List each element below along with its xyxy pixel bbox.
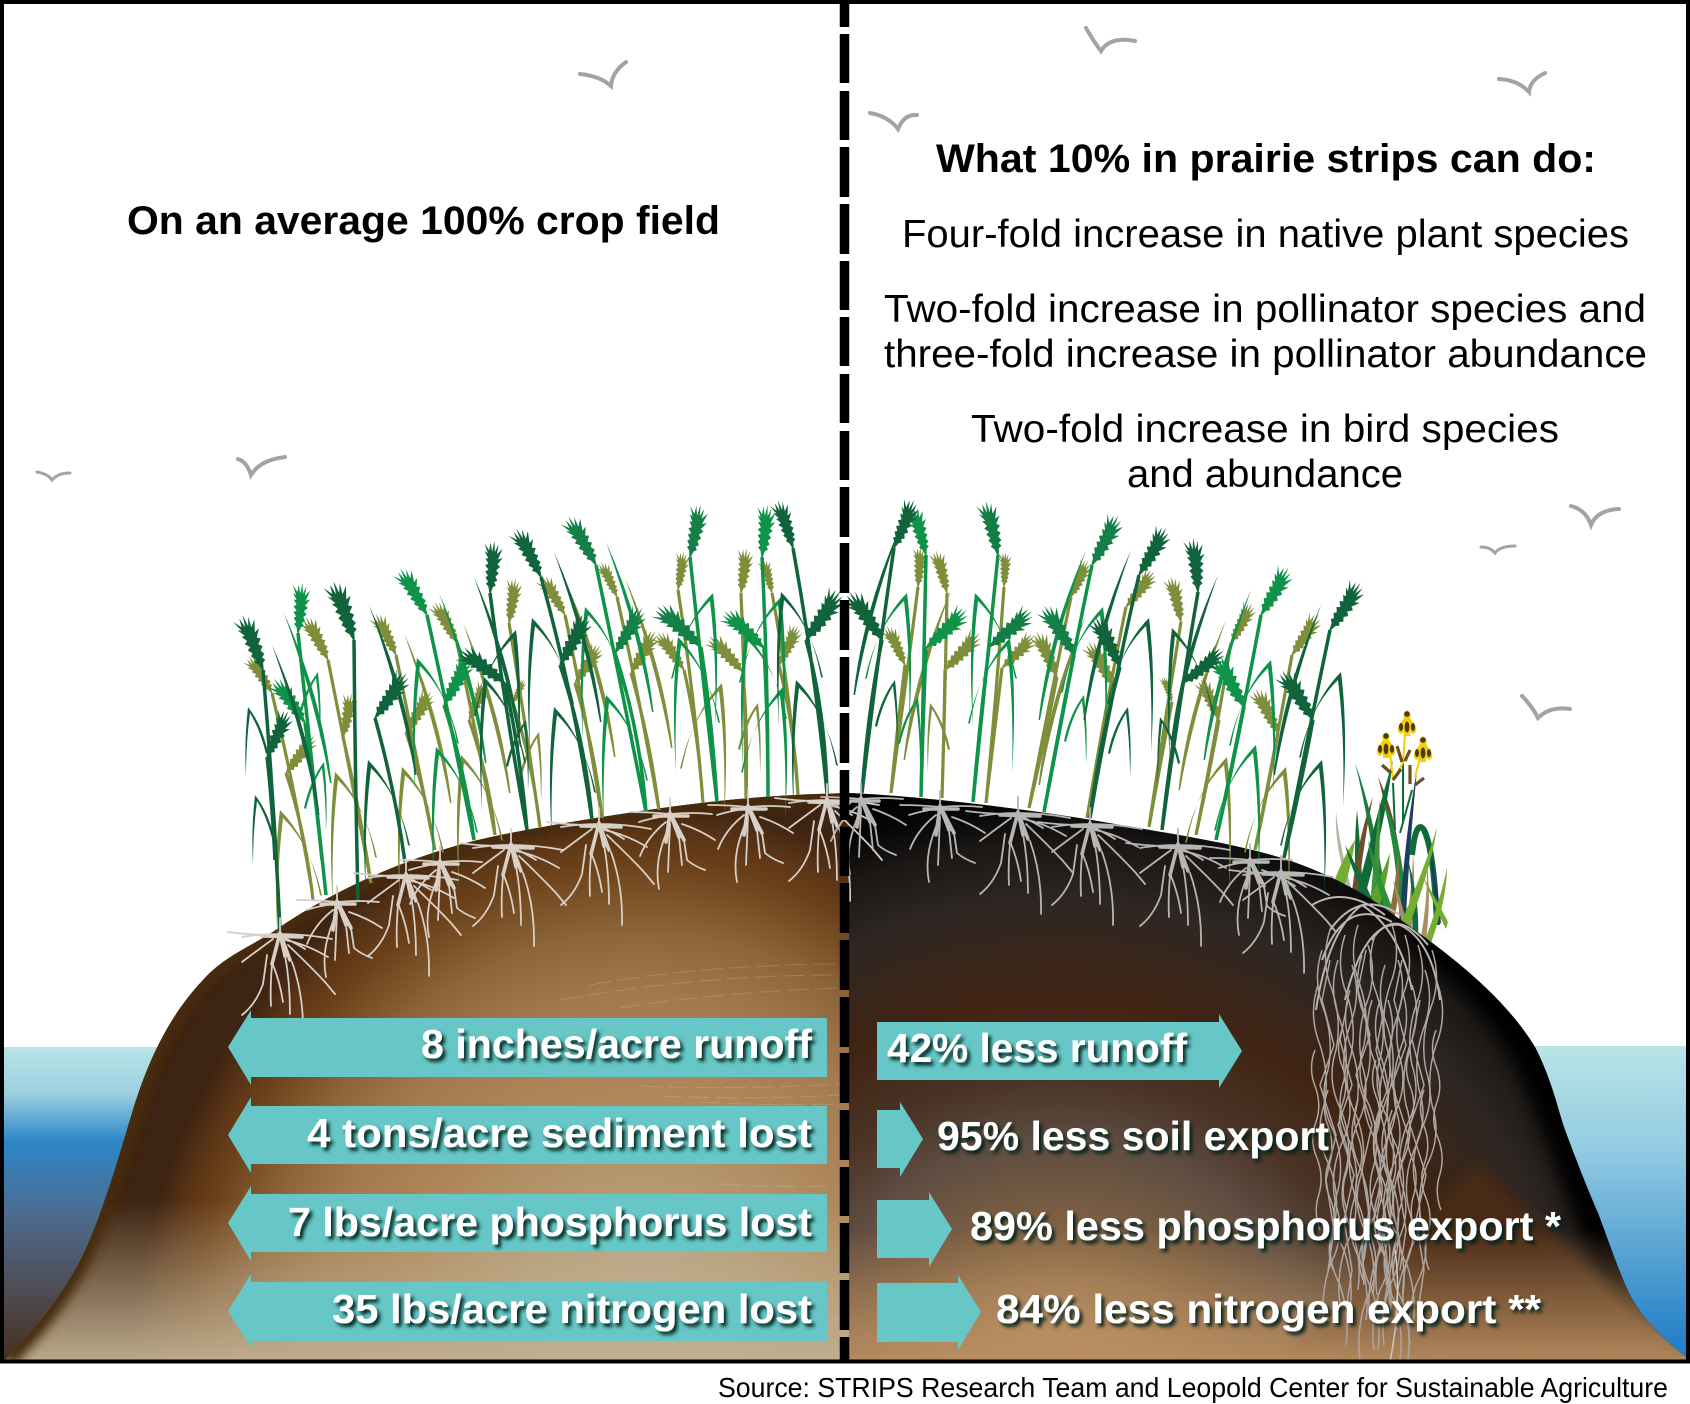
grass: right half — [840, 496, 1369, 902]
flower head — [1398, 710, 1416, 736]
source line: Source: STRIPS Research Team and Leopold Center for Sustainable Agriculture — [718, 1372, 1668, 1403]
right arrows — [877, 1014, 1561, 1350]
roots: left half — [228, 784, 882, 1035]
arrow: phosphorus lost: 7 lbs/acre phosphorus lost — [288, 1199, 812, 1245]
arrow: less soil export: 95% less soil export — [937, 1113, 1329, 1159]
benefit: pollinators: Two-fold increase in pollinator species and — [884, 288, 1646, 331]
flower head — [1414, 736, 1432, 762]
deep prairie root mass — [1312, 897, 1443, 1362]
benefit: birds — [971, 408, 1559, 496]
arrow: less nitrogen export — [877, 1275, 1541, 1350]
benefit: birds: and abundance — [1127, 453, 1403, 496]
heading: left: On an average 100% crop field — [127, 199, 720, 243]
arrow: runoff lost — [228, 1010, 827, 1085]
arrow: less phosphorus export — [877, 1192, 1561, 1267]
arrow: less runoff: 42% less runoff — [887, 1025, 1187, 1071]
water: left — [4, 1047, 224, 1362]
arrow: phosphorus lost — [228, 1186, 827, 1261]
water: right — [1480, 1046, 1686, 1361]
benefit: native plants: Four-fold increase in native plant species — [902, 213, 1629, 256]
flowering prairie plant — [1331, 710, 1448, 955]
roots: right half — [821, 783, 1336, 973]
benefit: birds: Two-fold increase in bird species — [971, 408, 1559, 451]
arrow: nitrogen lost — [228, 1274, 827, 1348]
arrow: less phosphorus export: 89% less phosphorus export * — [970, 1203, 1561, 1249]
text block: prairie strip benefits — [884, 137, 1647, 496]
flower head — [1377, 732, 1395, 758]
grass: left half — [232, 498, 850, 945]
soil: left half hill — [0, 780, 851, 1370]
arrow: runoff lost: 8 inches/acre runoff — [421, 1021, 812, 1067]
heading: right: What 10% in prairie strips can do: — [936, 137, 1596, 181]
arrow: less runoff — [877, 1014, 1242, 1088]
arrow: less nitrogen export: 84% less nitrogen export ** — [996, 1286, 1541, 1332]
left arrows — [228, 1010, 827, 1348]
arrow: sediment lost: 4 tons/acre sediment lost — [307, 1110, 812, 1156]
benefit: pollinators: three-fold increase in pollinator abundance — [884, 333, 1647, 376]
soil: right half hill — [849, 780, 1690, 1370]
arrow: sediment lost — [228, 1097, 827, 1173]
arrow: nitrogen lost: 35 lbs/acre nitrogen lost — [332, 1286, 812, 1332]
arrow: less soil export — [877, 1102, 1329, 1177]
birds — [37, 28, 1619, 718]
benefit: pollinators — [884, 288, 1647, 376]
